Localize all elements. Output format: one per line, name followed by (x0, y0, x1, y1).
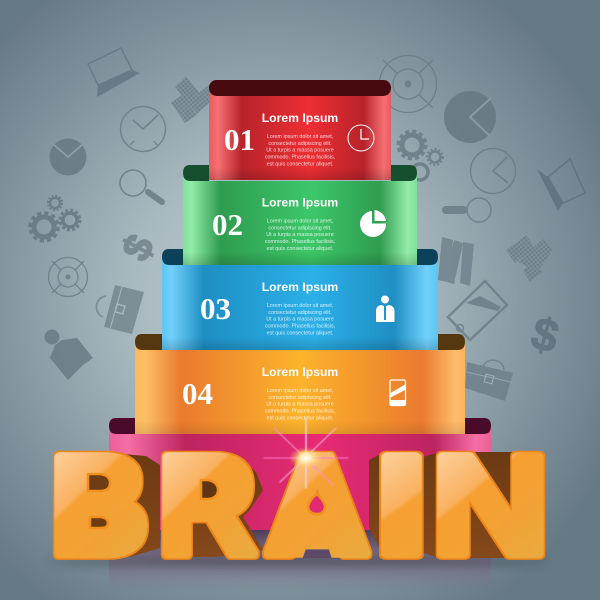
icon: magnifier right (446, 198, 491, 222)
text block 04: est quis consectetur aliquet. (267, 416, 333, 422)
icon: magnifier left (120, 170, 162, 202)
text block 01: consectetur adipiscing elit. (268, 141, 332, 147)
number 04: 04 (182, 376, 213, 411)
icon: clock (348, 125, 374, 151)
A bottom notch (303, 550, 331, 558)
icon: pie right (444, 91, 496, 143)
text block 03: commodo. Phasellus facilisis, (265, 324, 336, 330)
text block 01: Lorem ipsum dolor sit amet, (267, 134, 334, 140)
text block 03: est quis consectetur aliquet. (267, 330, 333, 336)
number 01: 01 (224, 122, 255, 157)
letter N: N (432, 428, 549, 584)
text block 04: Ut a turpis a massa posuere (266, 402, 334, 408)
letter I: I (375, 428, 428, 584)
background icons (30, 48, 585, 401)
heading 01: Lorem Ipsum (262, 111, 338, 125)
text block 01: est quis consectetur aliquet. (267, 162, 333, 168)
icon: target right (380, 56, 436, 112)
icon: dollar right: $ (526, 306, 564, 363)
icon: calculators left (171, 76, 209, 123)
sparkle flare (264, 418, 348, 488)
icon: target left (48, 258, 88, 296)
panel 03: blue (162, 249, 438, 350)
icon: pie left (50, 138, 86, 176)
text block 04: commodo. Phasellus facilisis, (265, 408, 336, 414)
letter counters (88, 474, 325, 528)
title: BRAIN 3D letters (50, 428, 549, 584)
panel 01: red (209, 80, 391, 180)
text block 03: Lorem ipsum dolor sit amet, (267, 303, 334, 309)
panel 05: pink base and reflection (109, 418, 491, 592)
text block 01 (265, 134, 336, 168)
letter R: R (158, 428, 256, 584)
text block 04: consectetur adipiscing elit. (268, 395, 332, 401)
panel 02: green (183, 165, 417, 265)
icon: dollar left: $ (114, 228, 163, 268)
icon: laptop right (537, 159, 585, 211)
heading 04: Lorem Ipsum (262, 365, 338, 379)
icon: smartphone (390, 380, 406, 406)
icon: businessman left (44, 330, 93, 380)
icon: tablet (448, 281, 507, 340)
icon: clock right (470, 148, 516, 194)
icon: binders (438, 237, 474, 286)
text block 04: Lorem ipsum dolor sit amet, (267, 388, 334, 394)
number 02: 02 (212, 207, 243, 242)
icon: pie (360, 210, 386, 237)
letter B: B (50, 428, 149, 584)
text block 02 (265, 218, 336, 252)
heading 02: Lorem Ipsum (262, 196, 338, 210)
text block 03 (265, 303, 336, 336)
ground shadow (48, 555, 548, 567)
text block 01: commodo. Phasellus facilisis, (265, 154, 336, 160)
icon: briefcase left (96, 285, 144, 334)
text block 02: est quis consectetur aliquet. (267, 246, 333, 252)
text block 02: commodo. Phasellus facilisis, (265, 239, 336, 245)
text block 02: consectetur adipiscing elit. (268, 226, 332, 232)
icon: laptop left (88, 48, 140, 97)
icon: gears left (30, 196, 80, 240)
letter A: A (265, 428, 370, 584)
text block 03: Ut a turpis a massa posuere (266, 316, 334, 322)
icon: calculators right (506, 235, 553, 282)
text block 04 (265, 388, 336, 422)
text block 01: Ut a turpis a massa posuere (266, 148, 334, 154)
icon: briefcase right (465, 360, 513, 401)
letter extrusions (80, 452, 530, 558)
heading 03: Lorem Ipsum (262, 280, 338, 294)
number 03: 03 (200, 291, 231, 326)
text block 03: consectetur adipiscing elit. (268, 310, 332, 316)
icon: businessman (376, 296, 394, 322)
icon: clock left (120, 106, 166, 152)
icon: gears right (398, 132, 443, 180)
text block 02: Lorem ipsum dolor sit amet, (267, 218, 334, 224)
text block 02: Ut a turpis a massa posuere (266, 232, 334, 238)
panel 04: orange (135, 334, 465, 434)
